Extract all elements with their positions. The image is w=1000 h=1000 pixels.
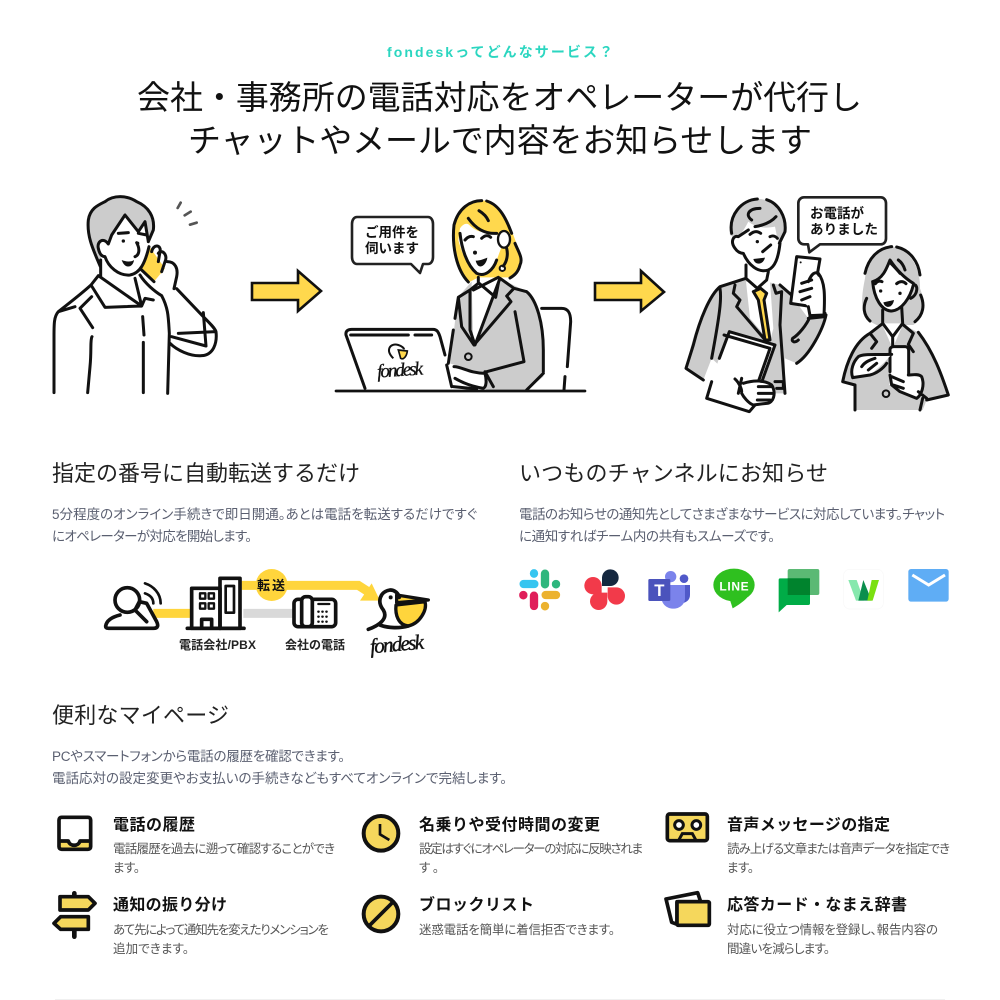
feature: voice message: ます。: [727, 861, 754, 875]
feature: notification routing: 通知の振り分け: [113, 895, 227, 914]
main title: [137, 79, 862, 159]
speech bubble text: staff: [810, 205, 878, 237]
feature: response cards and dictionary: 対応に役立つ情報を登録し、報告内容の: [727, 922, 938, 937]
feature: response cards and dictionary: [666, 893, 938, 956]
laptop logo wordmark: fondesk: [376, 358, 424, 383]
icon: tray: [59, 817, 91, 849]
text: my page description: [52, 749, 507, 786]
woman with smartphone: [843, 247, 948, 410]
icon: cassette: [667, 814, 707, 841]
feature: voice message: 読み上げる文章または音声データを指定でき: [727, 841, 950, 856]
illustration: operator with laptop: [336, 201, 585, 391]
diagram: call forwarding flow: [106, 569, 428, 629]
text: auto forward description: [52, 506, 477, 544]
feature: greeting and hours: 設定はすぐにオペレーターの対応に反映されま: [419, 842, 643, 856]
label: company phone: 会社の電話: [285, 637, 345, 652]
feature: response cards and dictionary: 間違いを減らします。: [727, 941, 830, 956]
icon: cards: [666, 893, 709, 925]
label: phone company: 電話会社/PBX: [179, 637, 256, 652]
text: auto forward description: 5分程度のオンライン手続きで即日開通。あとは電話を転送するだけですぐ: [52, 506, 477, 522]
feature: block list: [364, 895, 615, 937]
arrow: step one to two: [252, 271, 321, 311]
illustration: staff receiving notifications: [686, 197, 948, 412]
feature: notification routing: [54, 893, 329, 956]
icon: LINE WORKS: [844, 569, 883, 609]
speech bubble text: staff: お電話が: [810, 205, 864, 221]
icon: Chatwork: [584, 569, 625, 610]
text: channels description: 電話のお知らせの通知先としてさまざまなサービスに対応しています。チャット: [519, 506, 945, 522]
speech bubble: staff: [798, 197, 886, 252]
text: channels description: [519, 506, 945, 544]
feature: voice message: 音声メッセージの指定: [727, 816, 890, 834]
illustration: man on phone: [54, 197, 216, 393]
feature: response cards and dictionary: 応答カード・なまえ辞書: [727, 895, 907, 914]
text: my page description: PCやスマートフォンから電話の履歴を確認できます。: [52, 749, 345, 764]
man in suit: [686, 199, 826, 412]
icon: LINE: LINE: [719, 580, 749, 594]
feature: block list: ブロックリスト: [419, 895, 534, 914]
feature: greeting and hours: 名乗りや受付時間の変更: [419, 815, 600, 834]
icon: Google Chat: [779, 569, 819, 612]
speech bubble text: staff: ありました: [810, 222, 878, 237]
heading: my page: 便利なマイページ: [52, 703, 229, 728]
main title: チャットやメールで内容をお知らせします: [188, 122, 812, 159]
icon: pelican logo: [368, 590, 428, 629]
speech bubble: operator: [352, 217, 433, 273]
feature: call history: 電話履歴を過去に遡って確認することができ: [113, 841, 335, 856]
icon: Microsoft Teams: [648, 571, 690, 609]
label: fondesk wordmark: fondesk: [369, 630, 426, 658]
text: my page description: 電話応対の設定変更やお支払いの手続きなどもすべてオンラインで完結します。: [52, 770, 507, 786]
feature: greeting and hours: [364, 815, 643, 875]
feature: notification routing: あて先によって通知先を変えたりメンションを: [113, 922, 329, 937]
main title: 会社・事務所の電話対応をオペレーターが代行し: [137, 79, 862, 116]
feature: notification routing: 追加できます。: [113, 941, 189, 956]
feature: call history: 電話の履歴: [113, 816, 195, 834]
service icons row: [523, 569, 949, 612]
text: channels description: に通知すればチーム内の共有もスムーズです。: [519, 528, 775, 544]
icon: Slack: [523, 573, 556, 606]
icon: clock: [364, 816, 398, 851]
icon: email: [908, 569, 949, 602]
icon: signpost: [54, 893, 95, 937]
heading: channels: いつものチャンネルにお知らせ: [519, 461, 828, 486]
icon: caller: [106, 583, 161, 628]
icon: Microsoft Teams: T: [654, 581, 664, 600]
feature: voice message: [667, 814, 950, 875]
icon: office phone: [294, 597, 336, 627]
feature: block list: 迷惑電話を簡単に着信拒否できます。: [419, 922, 615, 937]
feature: call history: ます。: [113, 861, 140, 875]
feature: greeting and hours: す。: [419, 861, 439, 875]
label: forward badge: 転送: [257, 578, 285, 593]
icon: LINE: [713, 569, 755, 608]
speech bubble: operator: ご用件を: [365, 224, 419, 240]
eyebrow heading: fondeskってどんなサービス？: [387, 44, 613, 60]
icon: ban: [364, 897, 398, 931]
arrow: step two to three: [595, 271, 664, 311]
heading: auto forward: 指定の番号に自動転送するだけ: [52, 461, 360, 486]
feature: call history: [59, 816, 335, 875]
speech bubble: operator: 伺います: [365, 241, 419, 256]
text: auto forward description: にオペレーターが対応を開始します。: [52, 529, 252, 544]
icon: building: [187, 578, 244, 628]
forwarding lines: [153, 569, 380, 613]
